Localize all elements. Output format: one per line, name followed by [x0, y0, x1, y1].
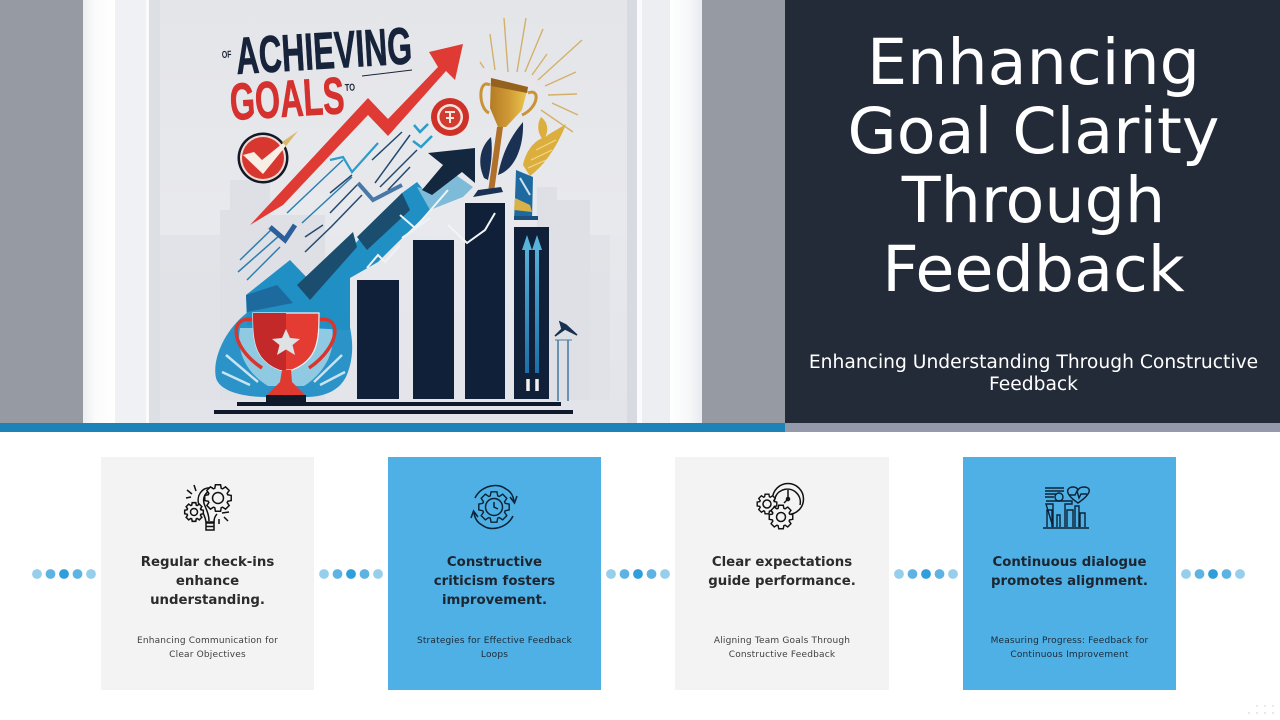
- icon: person, bars and heart: [1043, 486, 1090, 529]
- red rising arrow: [250, 44, 463, 225]
- icon: lightbulb with gears: [184, 484, 232, 531]
- white tick over bars: [448, 213, 495, 243]
- dotted connector 5: [1181, 569, 1245, 579]
- subtitle: Enhancing Understanding Through Constructive: [809, 352, 1258, 373]
- icon: gears with clock: [756, 482, 804, 530]
- poster heading: OF: [222, 48, 232, 60]
- subtext: Strategies for Effective Feedback: [417, 636, 572, 646]
- heading: [434, 555, 555, 608]
- subtext: Loops: [481, 650, 508, 660]
- red check badge: [238, 131, 298, 184]
- title: [848, 25, 1219, 306]
- heading: Regular check-ins: [141, 555, 274, 570]
- poster heading: [222, 17, 414, 132]
- heading: [991, 555, 1148, 589]
- heading: [141, 555, 274, 608]
- heading: guide performance.: [708, 574, 856, 589]
- heading: enhance: [176, 574, 239, 589]
- subtext: [417, 636, 572, 660]
- plane marker and poles: [555, 322, 577, 401]
- faint skyline: [160, 180, 610, 400]
- title: Enhancing: [867, 25, 1200, 99]
- subtext: Enhancing Communication for: [137, 636, 278, 646]
- accent bar: grey: [785, 423, 1280, 432]
- grey side bands: [0, 0, 785, 423]
- blue wreath: [215, 312, 352, 397]
- subtext: Measuring Progress: Feedback for: [991, 636, 1148, 646]
- panel: constructive criticism: [388, 457, 601, 690]
- hero illustration: achieving goals poster: [0, 0, 785, 423]
- panel: continuous dialogue: [963, 457, 1176, 690]
- up arrows in final bar: [522, 235, 542, 391]
- thin rising lines: [238, 124, 432, 280]
- navy feather plume: [473, 122, 523, 197]
- heading: criticism fosters: [434, 574, 555, 589]
- heading: promotes alignment.: [991, 574, 1148, 589]
- poster heading: TO: [345, 81, 355, 93]
- subtext: [991, 636, 1148, 660]
- heading: understanding.: [150, 593, 265, 608]
- blue and gold banner: [514, 170, 538, 220]
- heading: Constructive: [447, 555, 542, 570]
- poster heading: GOALS: [228, 67, 346, 132]
- bar chart bars: [357, 203, 549, 399]
- subtext: [137, 636, 278, 660]
- dotted connector 3: [606, 569, 670, 579]
- subtext: Continuous Improvement: [1010, 650, 1129, 660]
- dotted connector 4: [894, 569, 958, 579]
- golden wheat stalk: [523, 117, 566, 176]
- poster heading: ACHIEVING: [234, 17, 414, 86]
- blue rising arrow mass: [246, 148, 475, 330]
- subtext: Constructive Feedback: [729, 650, 835, 660]
- red trophy: [236, 313, 335, 402]
- heading: improvement.: [442, 593, 547, 608]
- dotted connector 1: [32, 569, 96, 579]
- icon: gear clock with cycle arrows: [470, 484, 518, 530]
- subtitle: Feedback: [989, 374, 1078, 395]
- poster panel: [160, 0, 627, 423]
- heading: [708, 555, 856, 589]
- faint corner dots: [1248, 705, 1274, 714]
- accent bar: blue: [0, 423, 785, 432]
- heading: Continuous dialogue: [992, 555, 1147, 570]
- title: Goal Clarity: [848, 94, 1219, 168]
- title panel: [785, 0, 1280, 423]
- red seal: [431, 98, 469, 136]
- window frame: [83, 0, 702, 423]
- heading: Clear expectations: [712, 555, 852, 570]
- title: Feedback: [882, 232, 1185, 306]
- title: Through: [902, 163, 1165, 237]
- gold trophy with rays: [480, 18, 582, 192]
- subtitle: [809, 352, 1258, 395]
- ground lines: [214, 402, 573, 414]
- panel: regular check-ins: [101, 457, 314, 690]
- subtext: [714, 636, 850, 660]
- subtext: Clear Objectives: [169, 650, 246, 660]
- dotted connector 2: [319, 569, 383, 579]
- panel: clear expectations: [675, 457, 889, 690]
- subtext: Aligning Team Goals Through: [714, 636, 850, 646]
